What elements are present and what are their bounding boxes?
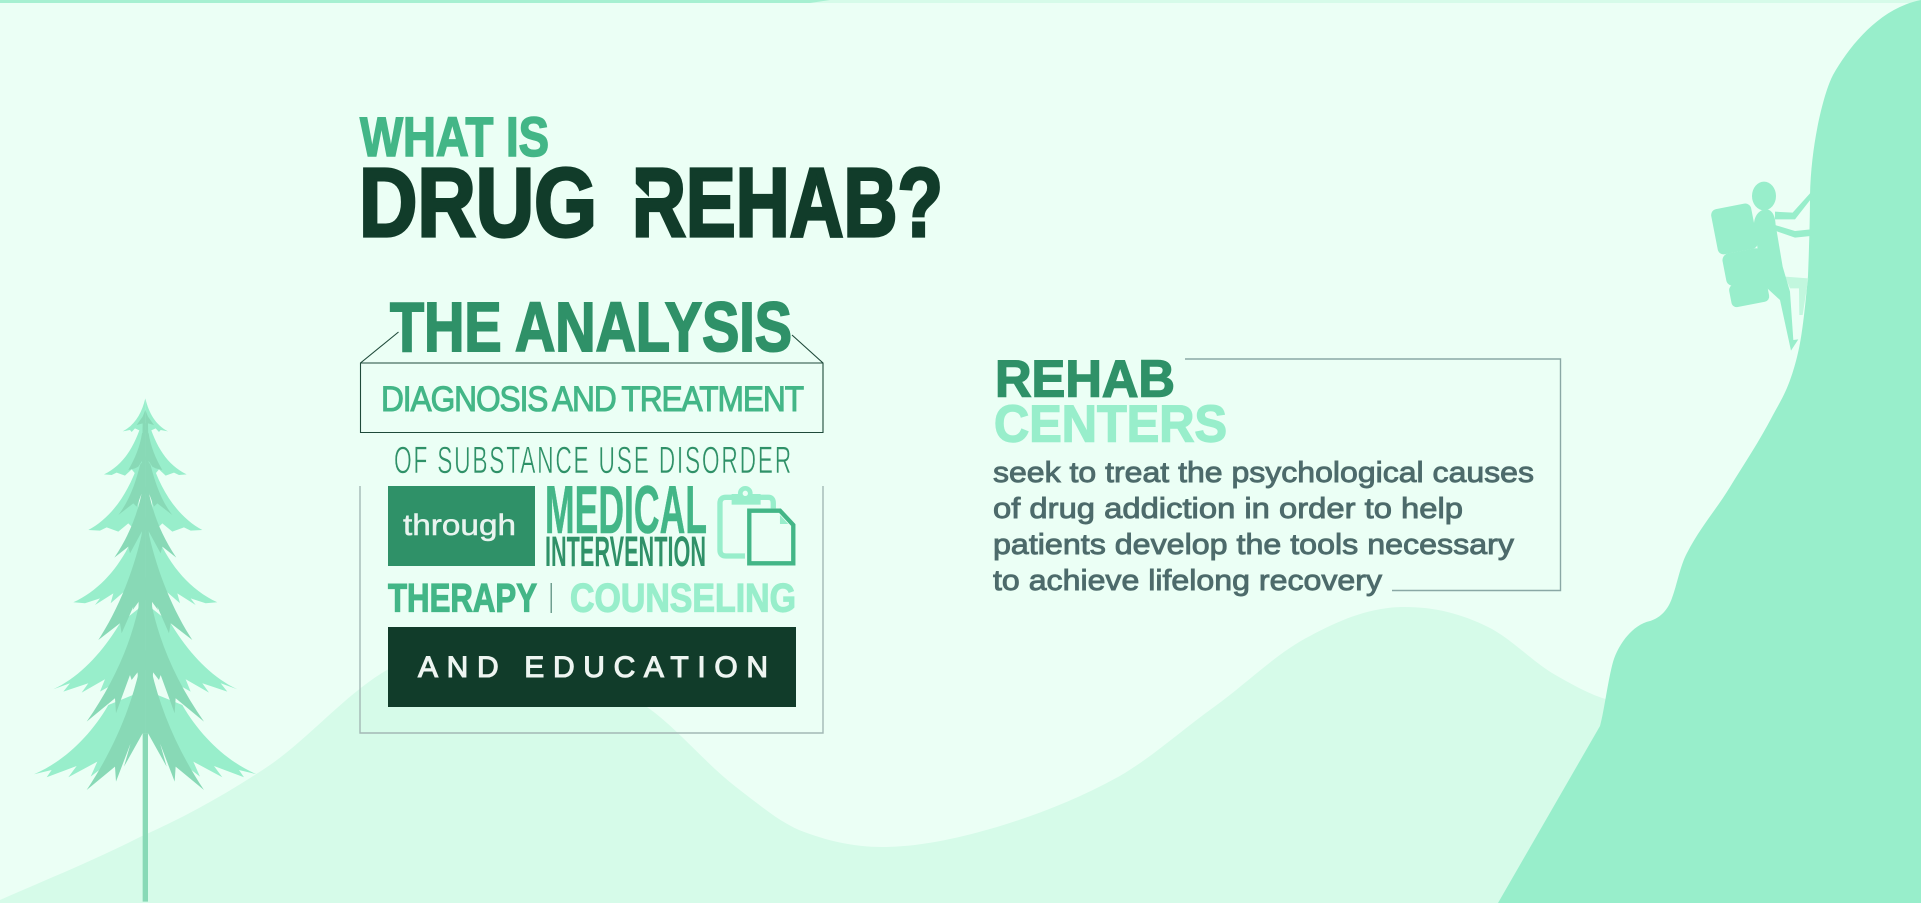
body text: of drug addiction in order to help <box>993 493 1463 525</box>
label: through <box>388 486 535 566</box>
icon: clipboard and document <box>720 486 793 563</box>
body text: to achieve lifelong recovery <box>993 565 1383 597</box>
frame <box>1185 359 1560 590</box>
text: counseling: COUNSELING <box>570 576 796 620</box>
body text <box>993 457 1534 597</box>
icon: climber silhouette <box>1710 182 1811 351</box>
body text: patients develop the tools necessary <box>993 529 1515 561</box>
heading: centers: CENTERS <box>994 396 1227 454</box>
icon: pine tree <box>34 398 257 902</box>
background hills <box>0 607 1700 903</box>
label: and education: AND EDUCATION <box>418 651 768 684</box>
title: drug rehab: REHAB? <box>632 148 943 257</box>
label: and education <box>388 627 796 707</box>
text: diagnosis and treatment: DIAGNOSIS AND TREATMENT <box>381 380 804 419</box>
divider <box>550 583 552 613</box>
text: therapy: THERAPY <box>388 576 537 620</box>
top edge strip <box>0 0 1921 3</box>
panel: the analysis <box>360 288 823 733</box>
box with roof lines <box>360 332 823 432</box>
label: through: through <box>403 509 516 542</box>
lower panel outline <box>360 486 823 733</box>
text: intervention: INTERVENTION <box>545 528 706 576</box>
title: drug rehab <box>359 148 943 257</box>
title: what is: WHAT IS <box>360 105 549 168</box>
title: drug rehab: DRUG <box>359 148 597 257</box>
text: medical: MEDICAL <box>545 472 707 548</box>
heading: the analysis: THE ANALYSIS <box>390 288 792 366</box>
panel: rehab centers <box>993 350 1560 597</box>
text: of substance use disorder: OF SUBSTANCE USE DISORDER <box>394 439 791 481</box>
body text: seek to treat the psychological causes <box>993 457 1534 489</box>
heading: rehab: REHAB <box>995 350 1175 408</box>
cliff <box>1498 0 1921 903</box>
